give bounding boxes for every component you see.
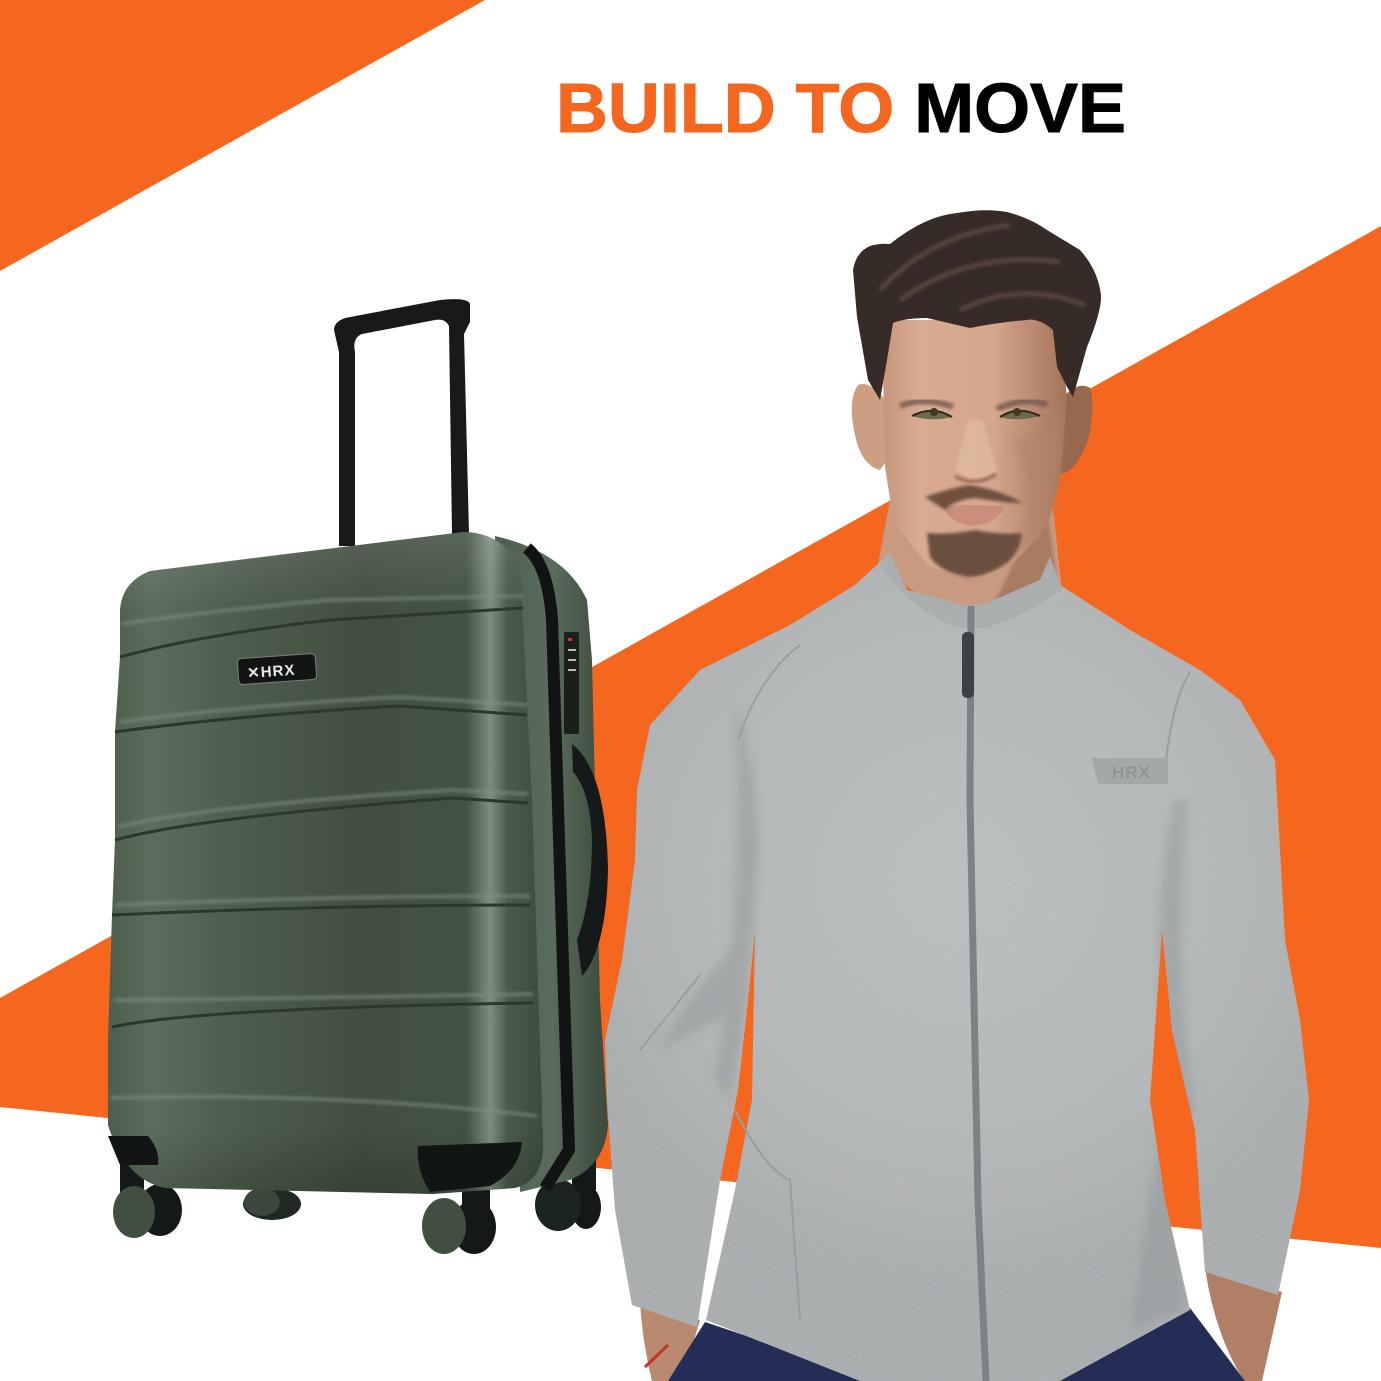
moustache <box>925 485 1023 510</box>
man <box>605 210 1309 1381</box>
collar <box>880 553 1062 628</box>
hair highlights <box>880 225 1085 310</box>
jacket with sleeves <box>605 553 1309 1381</box>
title: BUILD TO MOVE <box>556 69 1126 147</box>
wrist thread <box>645 1345 668 1367</box>
shell sheen overlay <box>108 532 543 1194</box>
suitcase side panel <box>495 536 608 1192</box>
suitcase logo badge: ✕HRX <box>247 662 296 682</box>
zipper <box>527 548 569 1188</box>
sleeve and body shading <box>660 700 1195 1330</box>
neck <box>878 500 1062 625</box>
eyes and brows <box>900 401 1047 419</box>
suitcase <box>108 299 608 1254</box>
suitcase rib shadows <box>112 608 533 1027</box>
goatee <box>927 530 1022 577</box>
wheels <box>113 1160 601 1254</box>
jacket zipper <box>970 606 986 1381</box>
telescopic handle <box>334 299 470 546</box>
suitcase logo badge <box>237 653 317 685</box>
orange diagonal band <box>0 226 1381 1248</box>
nose <box>955 420 998 482</box>
lips <box>943 505 1005 526</box>
orange corner triangle <box>0 0 485 271</box>
face shading <box>1010 400 1062 555</box>
right ear <box>1060 386 1093 473</box>
navy trousers <box>668 1308 1245 1381</box>
jacket chest logo: HRX <box>1112 763 1151 782</box>
face <box>882 320 1067 578</box>
side carry handle <box>572 744 608 976</box>
neck shadow <box>990 515 1056 612</box>
raglan seams <box>640 645 1190 1320</box>
suitcase rib highlights <box>110 596 537 1116</box>
combination lock <box>564 632 579 734</box>
hair <box>853 210 1101 400</box>
jacket chest logo <box>1092 758 1168 784</box>
suitcase front shell <box>108 532 543 1194</box>
left hand and wrist <box>640 1300 700 1381</box>
right hand and wrist <box>1205 1268 1282 1381</box>
corner bumpers <box>108 1136 158 1165</box>
left ear <box>852 384 887 470</box>
zipper pull <box>962 632 974 698</box>
